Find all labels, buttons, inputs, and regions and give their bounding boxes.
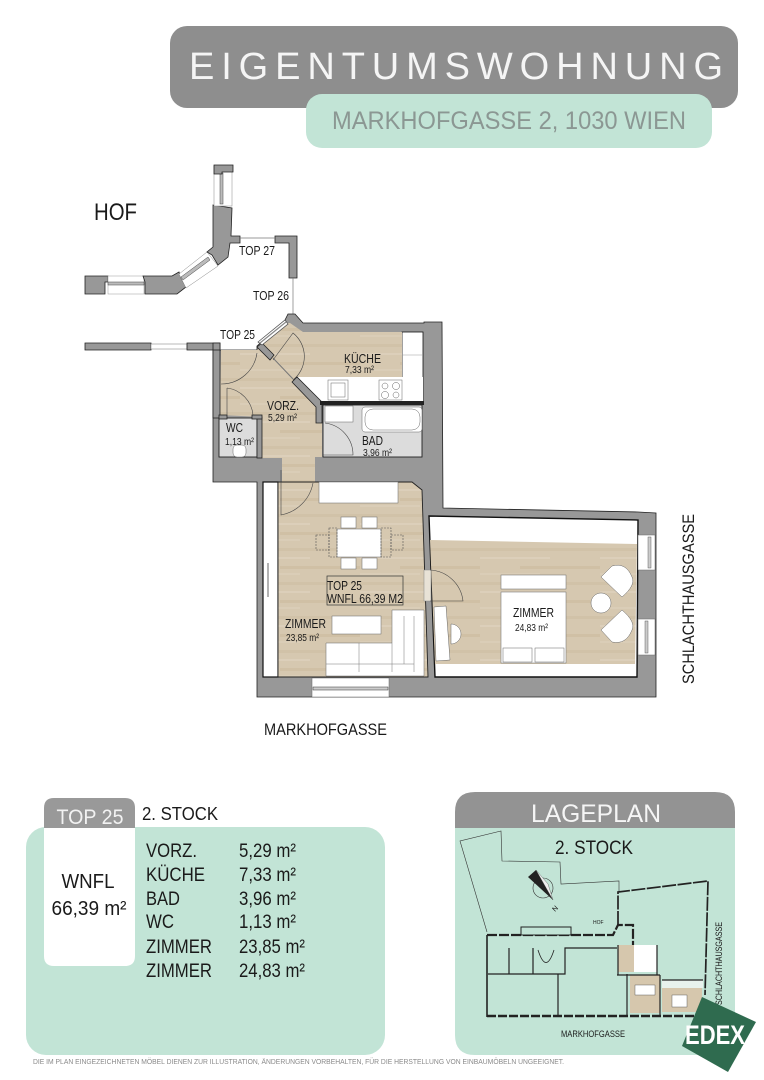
tab: top 25: TOP 25 (56, 806, 124, 829)
courtyard walls and windows (85, 165, 297, 350)
room labels: TOP 25 (220, 327, 255, 342)
room labels: VORZ. (267, 398, 299, 413)
compass: N (551, 905, 560, 913)
room labels: ZIMMER (285, 616, 326, 631)
room areas: 23,85 m² (239, 937, 305, 958)
room labels: HOF (94, 199, 137, 226)
room names: VORZ. (146, 841, 197, 862)
room areas: 5,29 m² (239, 841, 296, 862)
address pill: MARKHOFGASSE 2, 1030 WIEN (332, 107, 686, 135)
floor label: 2. STOCK (142, 804, 218, 824)
street label: schlachthausgasse: SCHLACHTHAUSGASSE (679, 514, 698, 684)
room labels: 7,33 m² (345, 365, 375, 376)
room floors (219, 323, 638, 677)
floor plan (85, 165, 698, 739)
label box: top 25: WNFL 66,39 M2 (327, 591, 403, 606)
total area box (44, 828, 135, 966)
room names: KÜCHE (146, 865, 205, 886)
room labels: TOP 26 (253, 288, 289, 303)
bedroom furniture (434, 565, 633, 663)
inner walls and openings (213, 320, 655, 697)
small labels: HOF (593, 920, 604, 926)
room labels: BAD (362, 433, 383, 448)
kitchen and bathroom fixtures (233, 355, 423, 457)
dining set (316, 517, 403, 569)
room areas: 7,33 m² (239, 865, 296, 886)
logo: edex: EDEX (685, 1020, 745, 1050)
room labels: 1,13 m² (225, 437, 255, 448)
site outline (460, 831, 619, 932)
room areas: 3,96 m² (239, 889, 296, 910)
tab: top 25 (44, 798, 135, 829)
small labels: MARKHOFGASSE (561, 1029, 625, 1039)
street label: markhofgasse: MARKHOFGASSE (264, 720, 387, 739)
room names (146, 841, 212, 982)
small labels: SCHLACHTHAUSGASSE (714, 922, 724, 1005)
compass (528, 870, 560, 913)
building plan (487, 881, 708, 1017)
apartment walls (213, 314, 656, 697)
room areas: 24,83 m² (239, 961, 305, 982)
lageplan heading: LAGEPLAN (531, 800, 661, 828)
footer disclaimer: DIE IM PLAN EINGEZEICHNETEN MÖBEL DIENEN ZUR ILLUSTRATION, ÄNDERUNGEN VORBEHALTEN, FÜR DIE HERSTELLUNG VON EINBAUMÖBELN UNGEEIGNET. (33, 1057, 564, 1066)
total area box: WNFL (62, 871, 114, 893)
room labels: ZIMMER (513, 605, 554, 620)
lageplan heading (455, 792, 735, 828)
room names: WC (146, 912, 174, 933)
room labels: 5,29 m² (268, 413, 298, 424)
label box: top 25: TOP 25 (327, 578, 362, 593)
title: EIGENTUMSWOHNUNG (189, 46, 723, 88)
room labels: 23,85 m² (286, 633, 320, 644)
panel: lageplan (455, 792, 756, 1072)
panel: area table (26, 798, 385, 1055)
room labels: 3,96 m² (363, 448, 393, 459)
room names: ZIMMER (146, 961, 212, 982)
room labels: TOP 27 (239, 243, 275, 258)
logo: edex (682, 997, 756, 1072)
room labels: KÜCHE (344, 351, 381, 366)
total area box: 66,39 m² (52, 898, 127, 920)
small labels (561, 920, 724, 1039)
room labels (94, 199, 554, 644)
room names: BAD (146, 889, 180, 910)
room names: ZIMMER (146, 937, 212, 958)
doors (221, 333, 463, 601)
label box: top 25 (327, 576, 403, 606)
living room furniture (326, 610, 424, 676)
header: title banner (170, 26, 738, 108)
room labels: 24,83 m² (515, 623, 549, 634)
address pill (306, 94, 712, 148)
room areas (239, 841, 305, 982)
lageplan floor label: 2. STOCK (555, 838, 633, 859)
room areas: 1,13 m² (239, 912, 296, 933)
room labels: WC (226, 420, 243, 435)
